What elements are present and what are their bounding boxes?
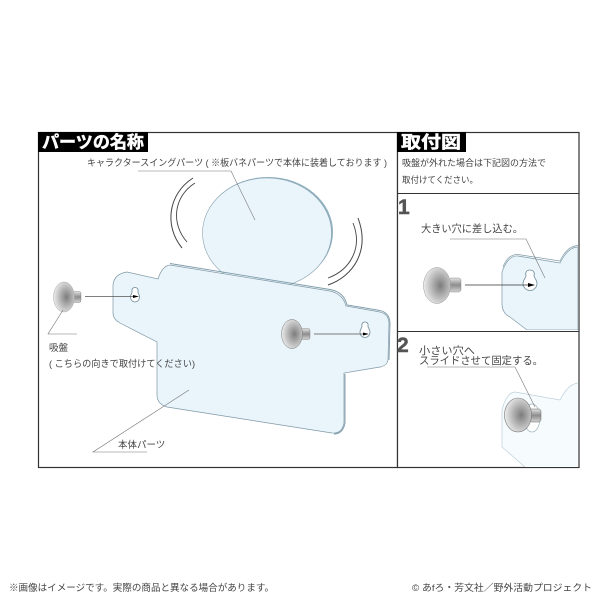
step 1 label: 大きい穴に差し込む。 (421, 222, 523, 235)
label: body part: 本体パーツ (118, 439, 165, 451)
label: suction cup: ( こちらの向きで取付けてください) (49, 358, 195, 370)
intro text: 取付けてください。 (402, 175, 478, 185)
suction cup right with arrow (282, 320, 369, 348)
step 2 body diagram (502, 383, 578, 467)
suction cup left with arrow (54, 282, 139, 312)
copyright: © あfろ・芳文社／野外活動プロジェクト (412, 582, 592, 594)
step 1 suction cup (424, 268, 535, 304)
step 1 label (421, 222, 545, 278)
step 2 label: スライドさせて固定する。 (419, 355, 543, 367)
heading: parts names: パーツの名称 (42, 133, 144, 152)
label: suction cup: 吸盤 (49, 342, 69, 354)
step 2 label: 小さい穴へ (419, 345, 475, 357)
step 1 number: 1 (398, 196, 410, 219)
step 2 (397, 334, 578, 467)
panel: parts names (38, 132, 398, 468)
step 2 suction cup (504, 398, 541, 432)
panel: mounting guide (397, 132, 579, 468)
footer note: ※画像はイメージです。実際の商品と異なる場合があります。 (9, 582, 274, 594)
intro text: 吸盤が外れた場合は下記図の方法で (402, 157, 546, 168)
heading: mounting guide: 取付図 (401, 133, 461, 152)
step 1 (398, 196, 578, 330)
label: swing part (87, 157, 387, 220)
infographic (10, 132, 590, 592)
label: suction cup (48, 310, 195, 370)
step 1 body diagram (502, 246, 578, 330)
step 2 label (419, 345, 543, 407)
keyhole right (360, 322, 370, 338)
label: body part (93, 390, 189, 452)
swing part circle (202, 177, 333, 288)
swing motion arcs (171, 178, 362, 285)
intro text (402, 157, 546, 185)
step 2 number: 2 (397, 334, 409, 357)
keyhole left (130, 288, 140, 302)
body part (113, 264, 390, 434)
label: swing part: キャラクタースイングパーツ ( ※板バネパーツで本体に装着しております ) (87, 157, 387, 169)
